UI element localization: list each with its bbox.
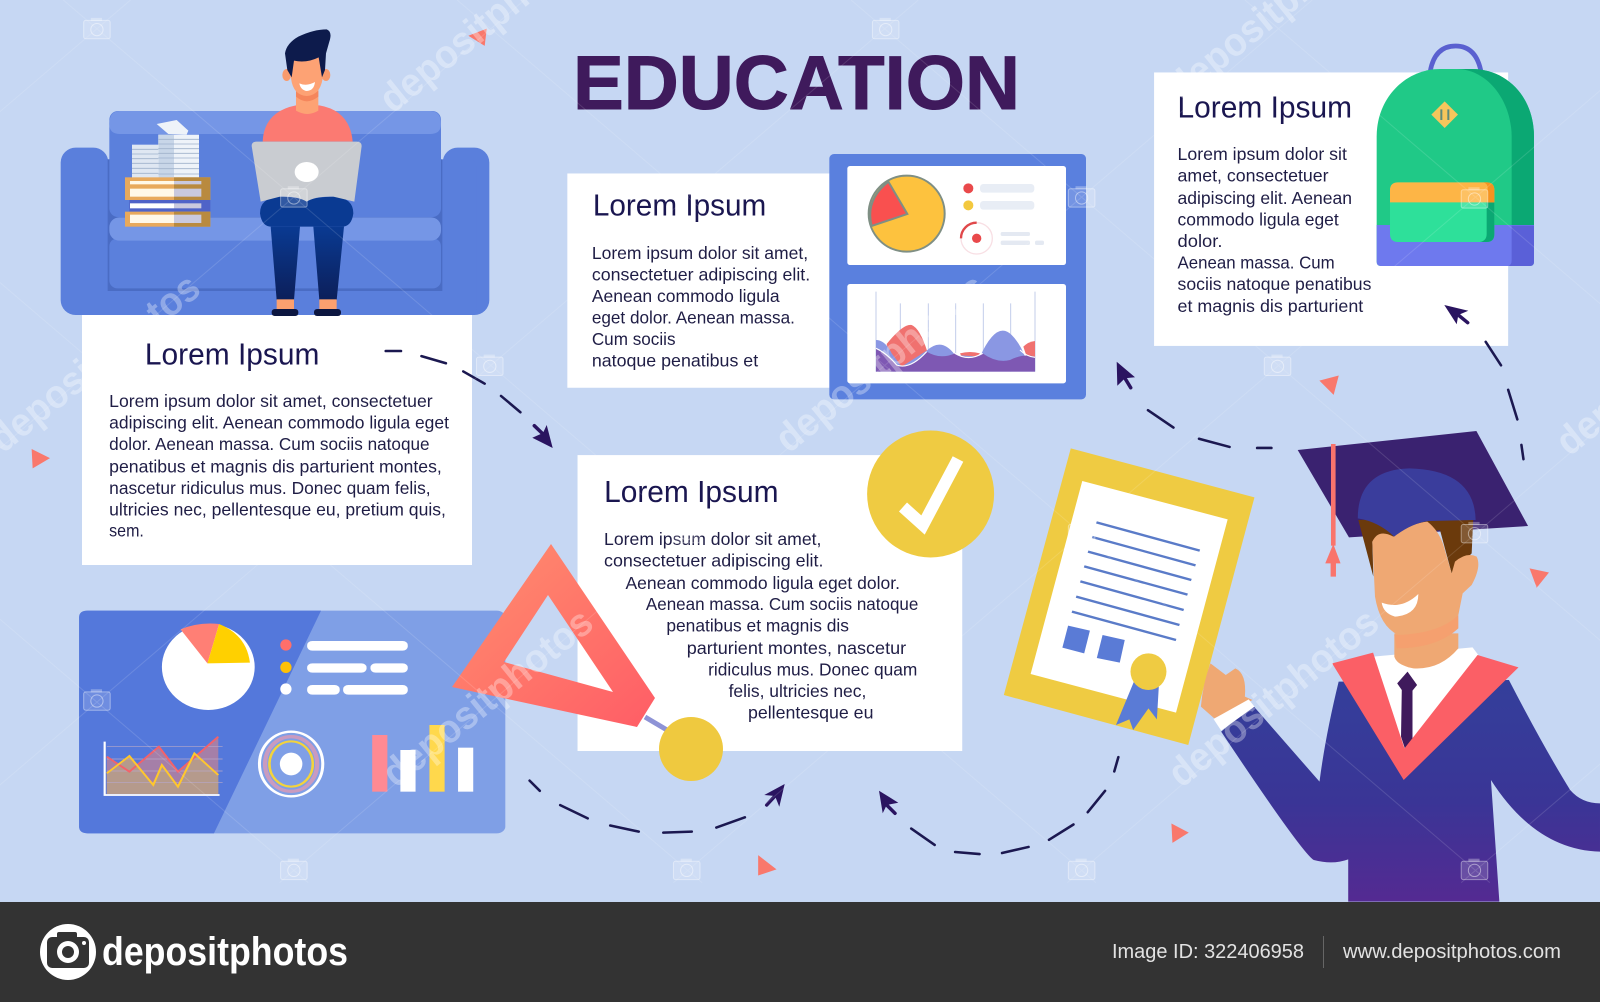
panel: analytics card text: eget dolor. Aenean massa. — [592, 307, 795, 327]
line chart — [105, 737, 223, 795]
panel: sofa card text: adipiscing elit. Aenean commodo ligula eget — [109, 413, 449, 433]
panel: sofa card text: dolor. Aenean massa. Cum sociis natoque — [109, 434, 430, 454]
panel: sofa card text: nascetur ridiculus mus. Donec quam felis, — [109, 478, 431, 498]
panel: analytics card text: consectetuer adipiscing elit. — [592, 265, 810, 285]
watermarks: depositphotos — [767, 265, 994, 461]
panel: sofa card text: Lorem Ipsum — [145, 337, 319, 371]
panel: analytics card text: Cum sociis — [592, 329, 676, 349]
panel: certificate card text: Lorem Ipsum — [604, 475, 779, 509]
icon: diploma — [1004, 448, 1254, 745]
footer bar — [0, 902, 1600, 1002]
panel: sofa card text — [82, 315, 472, 565]
logo: camera in circle — [40, 924, 96, 980]
panel: backpack card text: adipiscing elit. Aenean — [1178, 188, 1352, 208]
panel: certificate card text: parturient montes, nascetur — [687, 638, 906, 658]
panel: sofa card text: sem. — [109, 521, 144, 541]
pie chart — [162, 623, 255, 710]
icon: red triangle with yellow ball — [452, 544, 723, 781]
panel: blue analytics dashboard — [829, 154, 1086, 399]
panel: backpack card text: amet, consectetuer — [1178, 166, 1329, 186]
cap band, tie and lapels — [1332, 468, 1518, 780]
panel: sofa card text: Lorem ipsum dolor sit amet, consectetuer — [109, 391, 433, 411]
panel: certificate card text — [578, 455, 962, 751]
title: EDUCATION — [573, 41, 1020, 126]
logo wordmark: depositphotos — [102, 930, 348, 974]
panel: backpack card text: dolor. — [1178, 231, 1222, 251]
panel: backpack card text: Aenean massa. Cum — [1178, 252, 1335, 272]
donut chart — [259, 732, 323, 796]
panel: analytics card text: Lorem Ipsum — [593, 188, 766, 222]
panel: backpack card text: et magnis dis parturient — [1178, 296, 1363, 316]
panel: backpack card text: Lorem ipsum dolor sit — [1178, 144, 1347, 164]
panel: certificate card text: pellentesque eu — [748, 702, 873, 722]
legend — [280, 639, 408, 695]
panel: sofa card text: ultricies nec, pellentesque eu, pretium quis, — [109, 499, 446, 519]
icon: yellow check mark — [867, 430, 994, 558]
panel: certificate card text: felis, ultricies nec, — [729, 681, 866, 701]
image id: Image ID: 322406958 — [1112, 941, 1304, 963]
sofa — [61, 111, 489, 315]
arrow: dashboard to certificate card — [530, 781, 785, 833]
gown and hand — [1201, 431, 1600, 902]
panel: certificate card text: Lorem ipsum dolor sit amet, — [604, 529, 821, 549]
pie chart — [869, 176, 945, 252]
pie legend — [961, 183, 1044, 254]
area chart — [876, 292, 1035, 372]
bar chart — [372, 725, 473, 792]
panel: analytics card text: natoque penatibus et — [592, 350, 758, 370]
panel: certificate card text: penatibus et magnis dis — [666, 616, 849, 636]
watermarks: depositphotos — [374, 600, 601, 796]
arrow: graduate to backpack — [1444, 305, 1523, 459]
panel: sofa card text: penatibus et magnis dis parturient montes, — [109, 456, 442, 476]
illustration: man on sofa with laptop — [61, 29, 489, 316]
graduate head — [1358, 517, 1478, 668]
watermarks: depositphotos — [1160, 600, 1387, 796]
books and papers — [125, 120, 210, 227]
panel: backpack card text — [1154, 72, 1508, 346]
panel: certificate card text: Aenean massa. Cum sociis natoque — [646, 594, 918, 614]
arrow: sofa card to certificate card — [386, 351, 553, 448]
panel: backpack card text: sociis natoque penatibus — [1178, 274, 1372, 294]
panel: analytics card text: Aenean commodo ligula — [592, 286, 780, 306]
panel: certificate card text: Aenean commodo ligula eget dolor. — [626, 573, 900, 593]
site url: www.depositphotos.com — [1342, 941, 1561, 963]
man — [252, 29, 362, 316]
panel: statistics dashboard — [79, 611, 505, 833]
icon: backpack — [1377, 46, 1534, 266]
panel: backpack card text: Lorem Ipsum — [1178, 90, 1352, 124]
arrow: graduate to analytics — [1117, 362, 1271, 448]
panel: backpack card text: commodo ligula eget — [1178, 210, 1339, 230]
panel: certificate card text: ridiculus mus. Donec quam — [708, 660, 917, 680]
illustration: graduate — [1201, 431, 1600, 902]
panel: analytics card text: Lorem ipsum dolor sit amet, — [592, 243, 808, 263]
panel: analytics card text — [567, 173, 833, 388]
arrow: diploma to certificate — [879, 757, 1118, 854]
panel: certificate card text: consectetuer adipiscing elit. — [604, 550, 823, 570]
